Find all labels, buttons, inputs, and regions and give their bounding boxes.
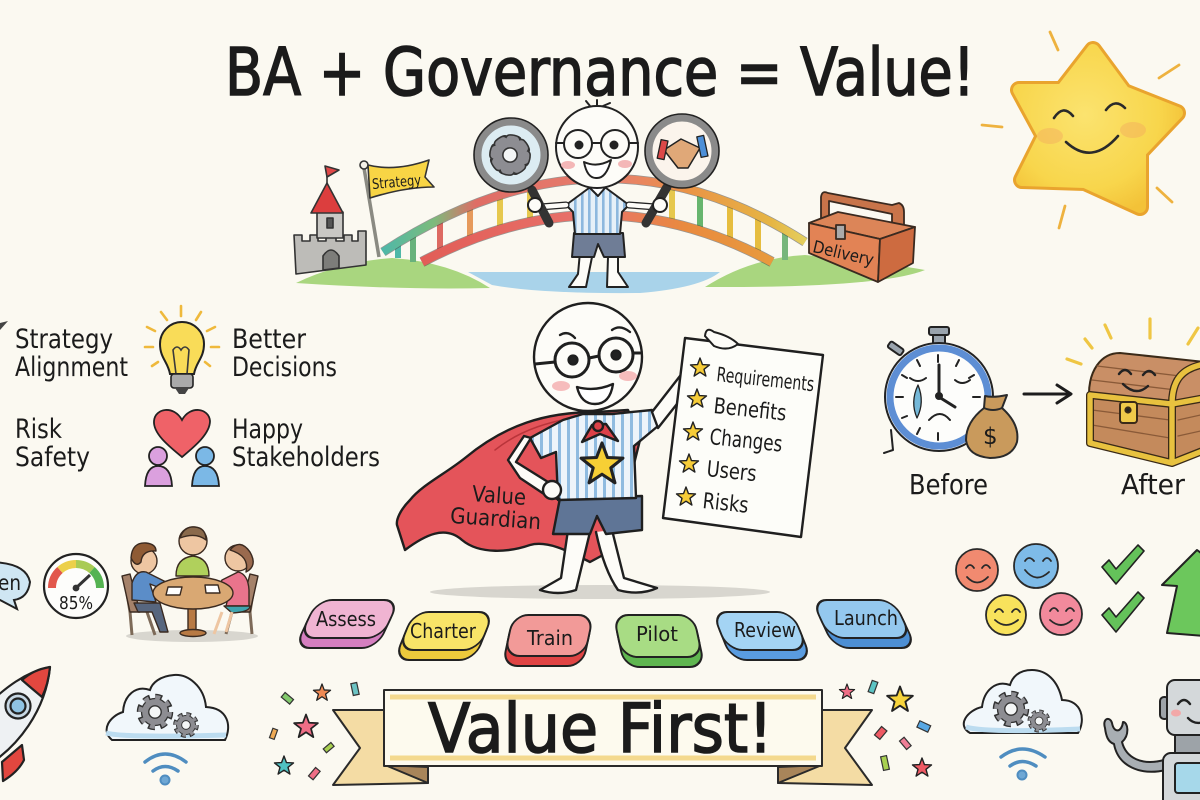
confetti left <box>269 683 359 780</box>
benefit: risk safety: Risk <box>15 414 62 445</box>
icon: money bag: $ <box>983 424 998 450</box>
icon: money bag <box>966 395 1017 458</box>
legs <box>540 530 657 593</box>
cape label <box>449 482 542 535</box>
checklist paper: Risks <box>701 489 750 519</box>
benefit: happy stakeholders <box>232 414 380 473</box>
benefit: better decisions <box>232 324 337 383</box>
benefit: risk safety: Safety <box>15 442 90 473</box>
label: after: After <box>1121 468 1185 501</box>
checklist paper: Users <box>705 457 758 487</box>
process buttons <box>295 600 916 667</box>
icon: cloud with gears and wifi <box>106 675 228 784</box>
shirt <box>530 410 658 500</box>
icon: heart and stakeholders <box>145 410 219 486</box>
icon: happy faces <box>956 544 1082 635</box>
neck bow <box>582 424 618 442</box>
button: assess: Assess <box>316 607 376 631</box>
button: assess <box>295 600 399 648</box>
benefit: better decisions: Decisions <box>232 352 337 383</box>
button: charter: Charter <box>410 619 477 643</box>
cape <box>397 410 640 562</box>
label: before: Before <box>909 468 988 501</box>
cape label: Value <box>471 482 527 511</box>
checklist paper: Benefits <box>712 394 788 427</box>
illustration: bridge from strategy to delivery <box>294 100 925 293</box>
arrow: growth <box>1162 550 1200 636</box>
confetti right <box>839 680 932 776</box>
bridge <box>383 178 805 262</box>
flag: Strategy <box>371 173 422 193</box>
speech bubble <box>0 562 30 609</box>
shorts <box>553 496 642 534</box>
gauge: 85% <box>44 554 108 618</box>
chest star <box>581 443 623 483</box>
button: train <box>502 615 593 666</box>
toolbox <box>809 192 915 282</box>
icon: check marks <box>1102 545 1144 632</box>
icon: light bulb <box>145 306 219 394</box>
icon: treasure chest <box>1067 319 1200 463</box>
benefit: happy stakeholders: Happy <box>232 414 303 445</box>
button: pilot <box>613 615 705 667</box>
banner: value first <box>333 690 872 785</box>
icon: smiling star <box>982 32 1179 228</box>
button: launch: Launch <box>834 606 898 630</box>
title: BA + Governance = Value! <box>225 34 975 111</box>
benefit: strategy alignment: Strategy <box>15 324 113 355</box>
ground shadow <box>430 585 770 599</box>
button: charter <box>394 612 494 660</box>
checklist paper: Requirements <box>715 362 815 396</box>
benefit: better decisions: Better <box>232 324 307 355</box>
gauge: 85%: 85% <box>59 593 93 614</box>
button: launch <box>812 600 916 648</box>
benefit: strategy alignment: Alignment <box>15 352 128 383</box>
magnifier: handshake <box>645 114 719 223</box>
ground: grass <box>296 255 925 288</box>
character: small guide with magnifiers <box>474 100 719 287</box>
flag <box>360 160 434 257</box>
icon: sad stopwatch <box>884 327 993 453</box>
head <box>534 303 642 411</box>
illustration: team meeting at table <box>122 527 258 642</box>
button: pilot: Pilot <box>636 622 678 646</box>
icon: robot <box>1104 680 1200 800</box>
button: review: Review <box>734 618 796 642</box>
arrow: before to after <box>1024 385 1071 403</box>
checklist paper: Changes <box>708 425 784 458</box>
benefit: strategy alignment <box>0 321 128 383</box>
benefit: risk safety <box>15 414 90 473</box>
button: train: Train <box>526 626 573 650</box>
benefit: happy stakeholders: Stakeholders <box>232 442 380 473</box>
button: review <box>712 612 812 660</box>
castle <box>294 166 366 274</box>
toolbox: Delivery <box>811 237 876 271</box>
checklist paper <box>663 330 823 537</box>
icon: cloud with gears and wifi right <box>964 670 1082 780</box>
cape label: Guardian <box>449 504 542 535</box>
character: value guardian hero <box>397 303 770 599</box>
icon: rocket <box>0 667 50 781</box>
raised arm <box>652 376 688 428</box>
hip arm <box>508 436 560 500</box>
banner: value first: Value First! <box>428 690 773 769</box>
magnifier: gear <box>474 118 549 223</box>
water <box>468 272 720 293</box>
